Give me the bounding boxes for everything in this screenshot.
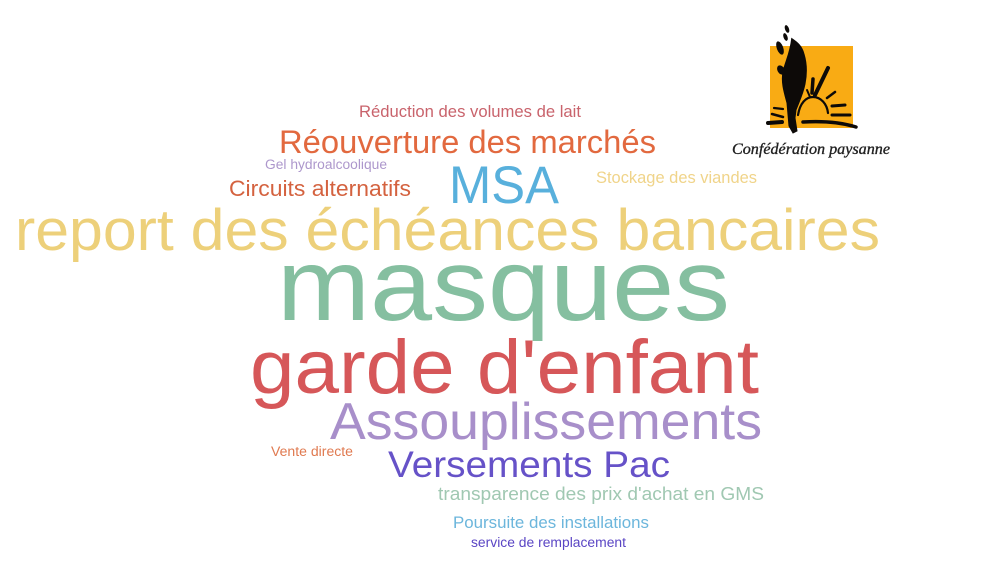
word: Stockage des viandes: Stockage des viandes [596,169,757,187]
word: Réduction des volumes de lait: Réduction des volumes de lait [359,103,581,121]
word: Versements Pac: Versements Pac [388,444,670,485]
word: Gel hydroalcoolique: Gel hydroalcoolique [265,157,387,172]
word: masques: masques [277,228,730,342]
logo: orange square [770,46,853,128]
logo: Confédération paysanne [732,25,890,158]
word: MSA: MSA [449,156,560,215]
logo: wheat and sun symbol [768,25,856,133]
word: Circuits alternatifs: Circuits alternatifs [229,176,411,201]
word: Réouverture des marchés: Réouverture des marchés [279,124,656,160]
word: Poursuite des installations: Poursuite des installations [453,513,649,532]
word: garde d'enfant: garde d'enfant [250,325,759,410]
word: transparence des prix d'achat en GMS: transparence des prix d'achat en GMS [438,484,764,504]
word: report des échéances bancaires: report des échéances bancaires [15,198,880,263]
logo: wordmark: Confédération paysanne [732,141,890,158]
word: Vente directe: Vente directe [271,444,353,459]
word: Assouplissements: Assouplissements [330,393,762,451]
word: service de remplacement: service de remplacement [471,535,626,550]
